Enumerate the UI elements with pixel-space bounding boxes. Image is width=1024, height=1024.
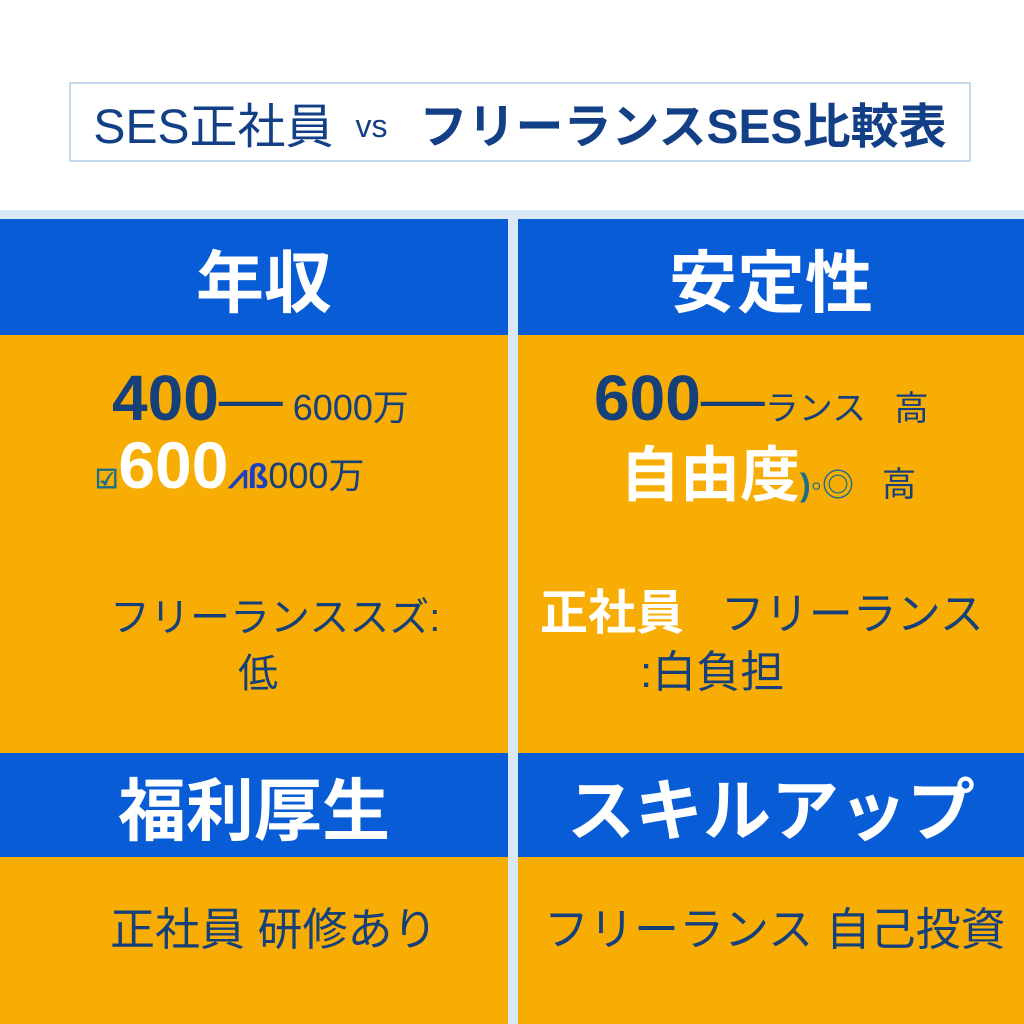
title: vs xyxy=(355,108,387,144)
panel: 福利厚生 header xyxy=(0,753,508,857)
text: 600 high: 600—ランス 高 xyxy=(594,362,928,434)
text: freelance low xyxy=(110,596,440,696)
panel: スキルアップ body xyxy=(518,857,1024,1024)
panel: 安定性 header xyxy=(518,219,1024,335)
text: employee vs freelance xyxy=(540,587,984,697)
panel: 安定性 body xyxy=(518,335,1024,753)
text: 600 range: ☑600⩘ß000万 xyxy=(95,428,364,502)
panel: 年収 header xyxy=(0,219,508,335)
text: 400 range: 400— 6000万 xyxy=(112,362,409,434)
panel: スキルアップ header: スキルアップ xyxy=(567,774,975,850)
title: フリーランスSES比較表 xyxy=(419,101,947,154)
text: self investment: フリーランス 自己投資 xyxy=(544,904,1006,955)
text: freedom high: 自由度)◦◎ 高 xyxy=(620,442,916,509)
title xyxy=(69,82,971,162)
title: SES正社員 xyxy=(93,101,333,154)
text: freelance low: フリーランススズ: xyxy=(110,596,440,640)
panel: スキルアップ header xyxy=(518,753,1024,857)
panel: 福利厚生 header: 福利厚生 xyxy=(118,774,390,850)
panel: 年収 header: 年収 xyxy=(196,246,332,322)
text: employee vs freelance: 正社員 フリーランス xyxy=(540,587,984,640)
text: freelance low: 低 xyxy=(238,652,278,696)
text: training: 正社員 研修あり xyxy=(110,904,438,955)
panel: 年収 body xyxy=(0,335,508,753)
panel: 安定性 header: 安定性 xyxy=(669,246,873,322)
panel: 福利厚生 body xyxy=(0,857,508,1024)
text: employee vs freelance: :白負担 xyxy=(640,648,784,697)
background strip xyxy=(0,210,1024,1024)
